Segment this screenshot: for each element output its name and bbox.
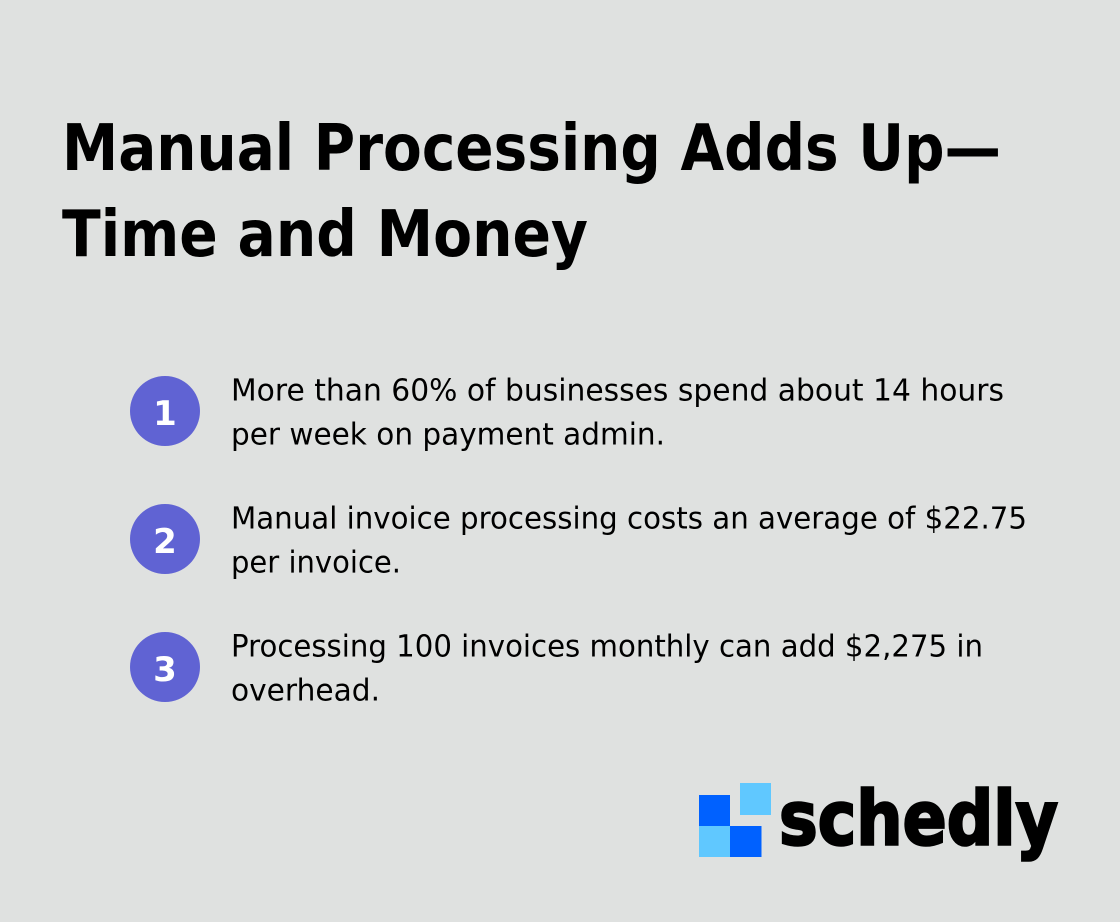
list item 1 xyxy=(130,374,1004,452)
list item 2 xyxy=(130,502,1027,580)
title: Manual Processing Adds Up— xyxy=(62,112,1001,186)
item 2 text: Manual invoice processing costs an average of $22.75 xyxy=(231,502,1027,536)
title: Time and Money xyxy=(62,198,588,272)
number badge 3 xyxy=(130,632,200,702)
number badge 1 xyxy=(130,376,200,446)
logo wordmark: schedly xyxy=(779,774,1058,862)
item 3 text: overhead. xyxy=(231,674,380,708)
item 2 text xyxy=(231,502,1027,580)
icon: logo squares xyxy=(699,783,771,857)
schedly logo xyxy=(699,774,1058,862)
item 1 text: per week on payment admin. xyxy=(231,418,665,452)
title xyxy=(62,112,1001,272)
number badge 3: 3 xyxy=(153,650,177,690)
list item 3 xyxy=(130,630,983,708)
item 1 text: More than 60% of businesses spend about 14 hours xyxy=(231,374,1004,408)
number badge 1: 1 xyxy=(153,394,177,434)
number badge 2: 2 xyxy=(153,522,177,562)
item 2 text: per invoice. xyxy=(231,546,401,580)
item 3 text xyxy=(231,630,983,708)
item 3 text: Processing 100 invoices monthly can add $2,275 in xyxy=(231,630,983,664)
item 1 text xyxy=(231,374,1004,452)
number badge 2 xyxy=(130,504,200,574)
